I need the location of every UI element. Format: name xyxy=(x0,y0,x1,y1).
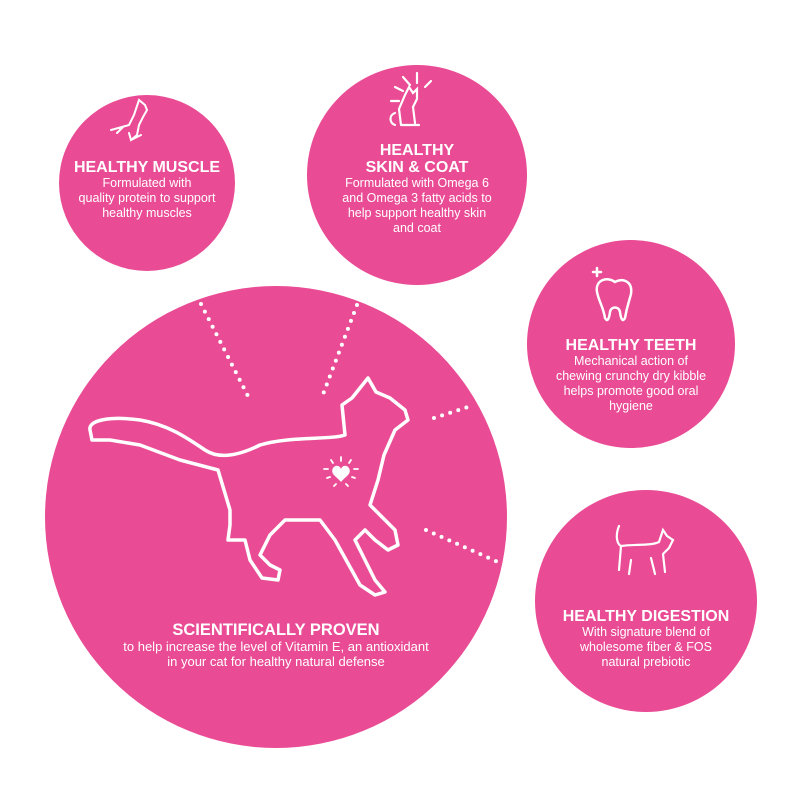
text: healthy muscle: healthy muscles xyxy=(102,206,192,220)
text: healthy teeth: hygiene xyxy=(609,399,653,413)
icon: walking cat xyxy=(616,524,674,576)
text: healthy teeth xyxy=(556,337,706,413)
text: skin & coat: SKIN & COAT xyxy=(366,159,468,176)
text: healthy muscle: Formulated with xyxy=(103,176,191,190)
text: healthy teeth: helps promote good oral xyxy=(564,384,698,398)
text: healthy muscle: HEALTHY MUSCLE xyxy=(74,159,220,176)
panel: healthy muscle xyxy=(59,95,235,271)
text: scientifically proven: SCIENTIFICALLY PROVEN xyxy=(172,621,380,639)
icon: heart with rays xyxy=(332,466,350,482)
illustration: cat outline with heart xyxy=(88,302,498,597)
text: skin & coat: help support healthy skin xyxy=(348,206,486,220)
text: healthy teeth: HEALTHY TEETH xyxy=(566,337,696,354)
text: skin & coat: HEALTHY xyxy=(380,142,454,159)
dotted rays xyxy=(201,304,498,562)
panel: scientifically proven xyxy=(45,286,507,748)
panel: healthy teeth xyxy=(527,240,735,448)
text: healthy digestion: HEALTHY DIGESTION xyxy=(563,608,729,625)
panel: healthy digestion xyxy=(535,490,757,712)
icon: tooth xyxy=(592,266,632,322)
text: skin & coat: and coat xyxy=(393,221,441,235)
text: healthy digestion: wholesome fiber & FOS xyxy=(580,640,712,654)
text: skin & coat: Formulated with Omega 6 xyxy=(345,176,489,190)
text: healthy muscle xyxy=(74,159,220,220)
text: scientifically proven: in your cat for healthy natural defense xyxy=(167,654,385,669)
text: skin & coat: and Omega 3 fatty acids to xyxy=(342,191,492,205)
text: healthy teeth: chewing crunchy dry kibble xyxy=(556,369,706,383)
text: healthy digestion: natural prebiotic xyxy=(602,655,690,669)
text: skin & coat xyxy=(342,142,492,235)
text: scientifically proven xyxy=(123,621,429,669)
text: healthy digestion: With signature blend of xyxy=(582,625,710,639)
panel: skin & coat xyxy=(307,65,527,285)
icon: sitting cat with rays xyxy=(389,72,432,126)
text: healthy muscle: quality protein to support xyxy=(79,191,215,205)
text: healthy digestion xyxy=(563,608,729,669)
text: scientifically proven: to help increase the level of Vitamin E, an antioxidant xyxy=(123,639,429,654)
icon: jumping cat xyxy=(110,98,148,142)
text: healthy teeth: Mechanical action of xyxy=(574,354,688,368)
